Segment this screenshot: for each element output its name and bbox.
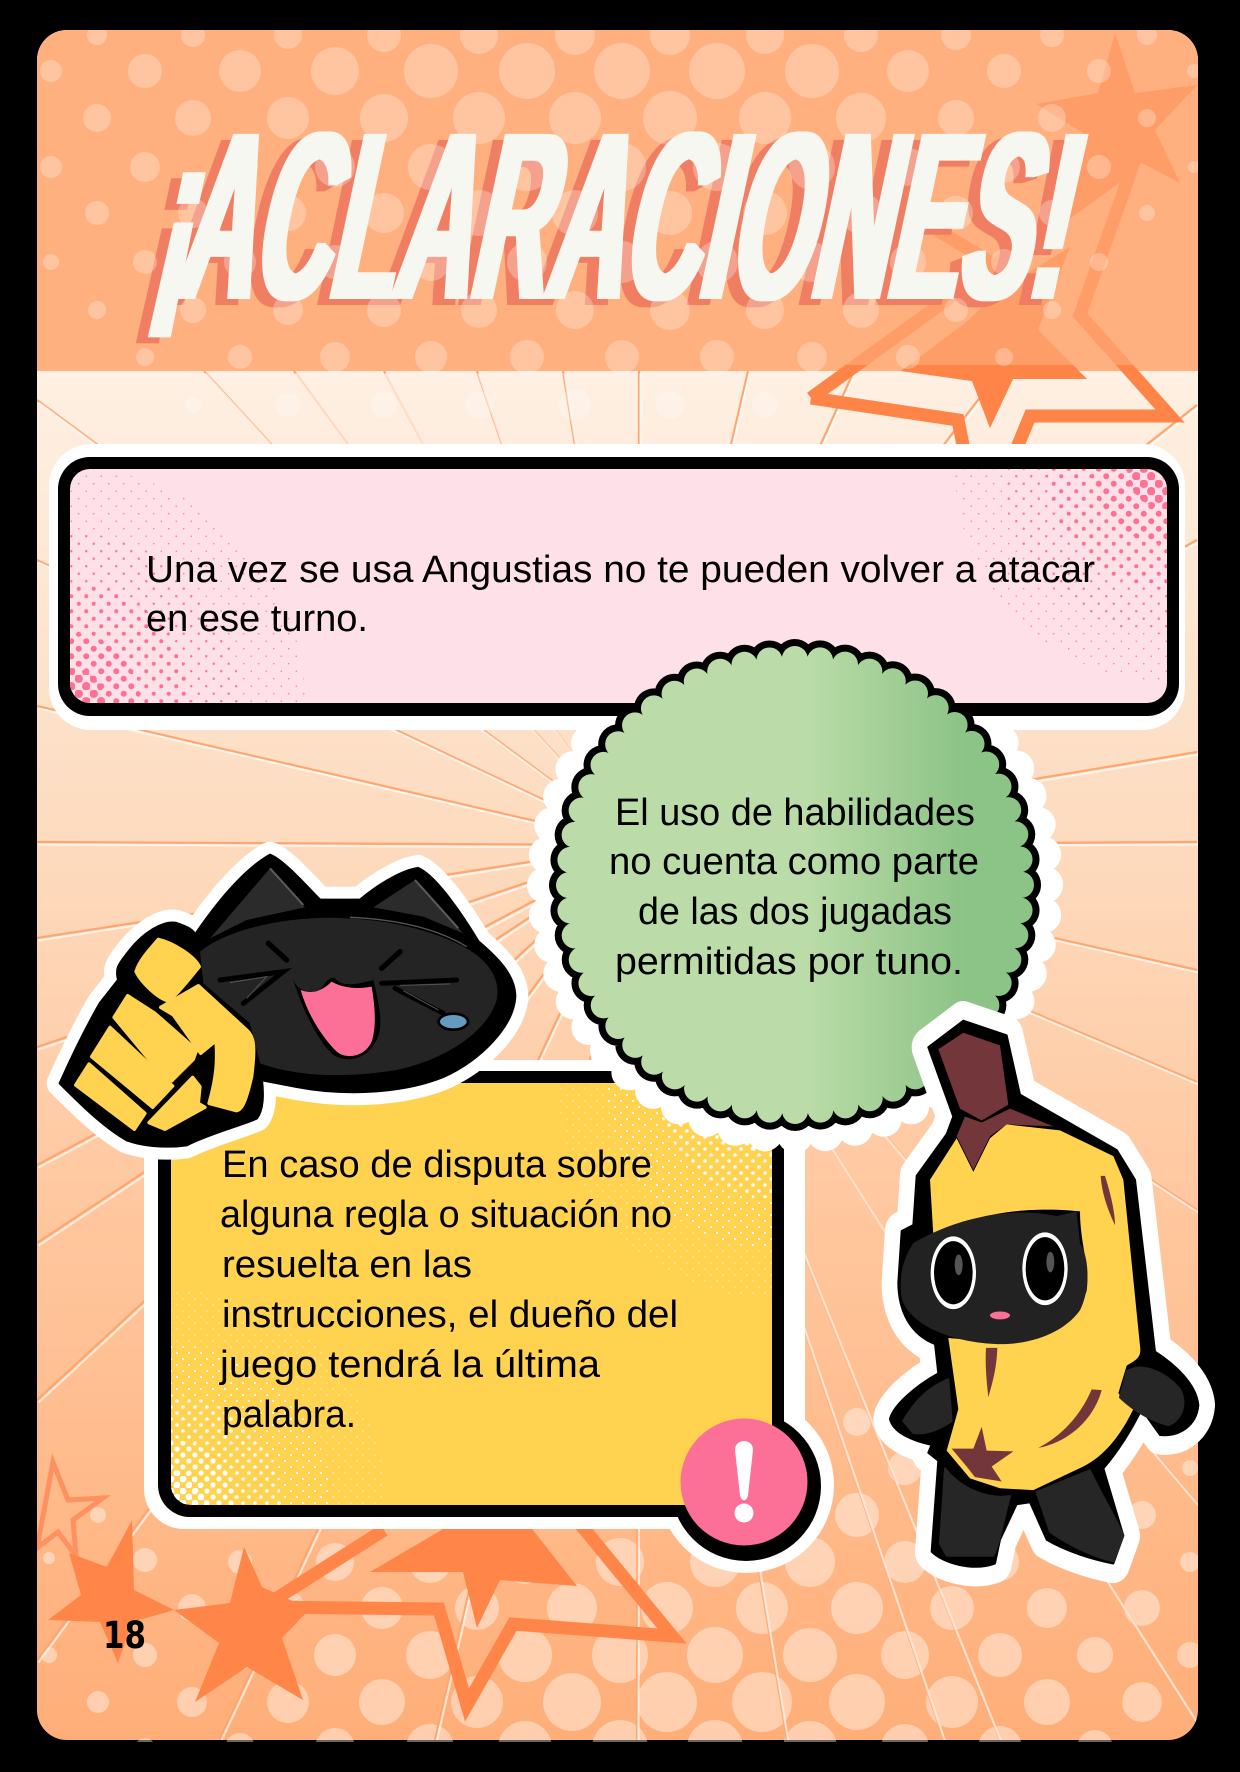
panel: yellow note with exclamation badge (144, 1060, 834, 1573)
page number: 18 (103, 1614, 146, 1657)
star filled 2 (174, 1547, 310, 1702)
star filled 1 (48, 1520, 174, 1663)
star filled 3 (370, 1525, 577, 1628)
marks (952, 1176, 1115, 1481)
text: yellow note: palabra. (222, 1394, 356, 1436)
tear (439, 1014, 468, 1030)
header dots (40, 15, 1201, 374)
body (930, 1124, 1140, 1490)
text: yellow note: juego tendrá la última (219, 1344, 601, 1386)
face (901, 1211, 1087, 1344)
fist (76, 939, 254, 1129)
nose (990, 1311, 1010, 1319)
text: pink note (146, 549, 1095, 640)
text: green circle: El uso de habilidades (615, 792, 975, 834)
title: ¡ACLARACIONES! (139, 81, 1107, 350)
panel: green scalloped circle (545, 635, 1045, 1135)
text: green circle (609, 792, 979, 983)
eyes (931, 1236, 976, 1309)
icon: black cat pointing fist (60, 855, 515, 1146)
title shadow: ¡ACLARACIONES! (127, 87, 1095, 356)
text: green circle: permitidas por tuno. (615, 941, 963, 983)
text: pink note: Una vez se usa Angustias no te pueden volver a atacar (146, 549, 1095, 591)
stem (938, 1033, 1008, 1120)
text: green circle: no cuenta como parte (609, 841, 979, 883)
star big outline (263, 1525, 672, 1705)
icon: banana cat character (890, 1021, 1198, 1567)
star: filled lower (901, 247, 1087, 428)
icon: exclamation badge (680, 1418, 808, 1546)
text: yellow note: En caso de disputa sobre (222, 1144, 652, 1186)
text: yellow note (219, 1144, 678, 1436)
star outline small (37, 1462, 103, 1556)
stars: top right (811, 33, 1197, 450)
header band (37, 30, 1198, 371)
text: yellow note: alguna regla o situación no (220, 1194, 672, 1236)
star: outline top right (in header) (811, 165, 1170, 450)
star: filled top right (1036, 33, 1197, 215)
stars: bottom left (37, 1462, 672, 1705)
text: pink note: en ese turno. (146, 598, 368, 640)
star: saturated part below header (807, 365, 1184, 444)
text: yellow note: instrucciones, el dueño del (222, 1294, 678, 1336)
panel: pink note (49, 444, 1185, 730)
text: green circle: de las dos jugadas (638, 891, 952, 933)
limbs (903, 1368, 1183, 1561)
text: yellow note: resuelta en las (222, 1244, 472, 1286)
mouth (292, 975, 380, 1059)
